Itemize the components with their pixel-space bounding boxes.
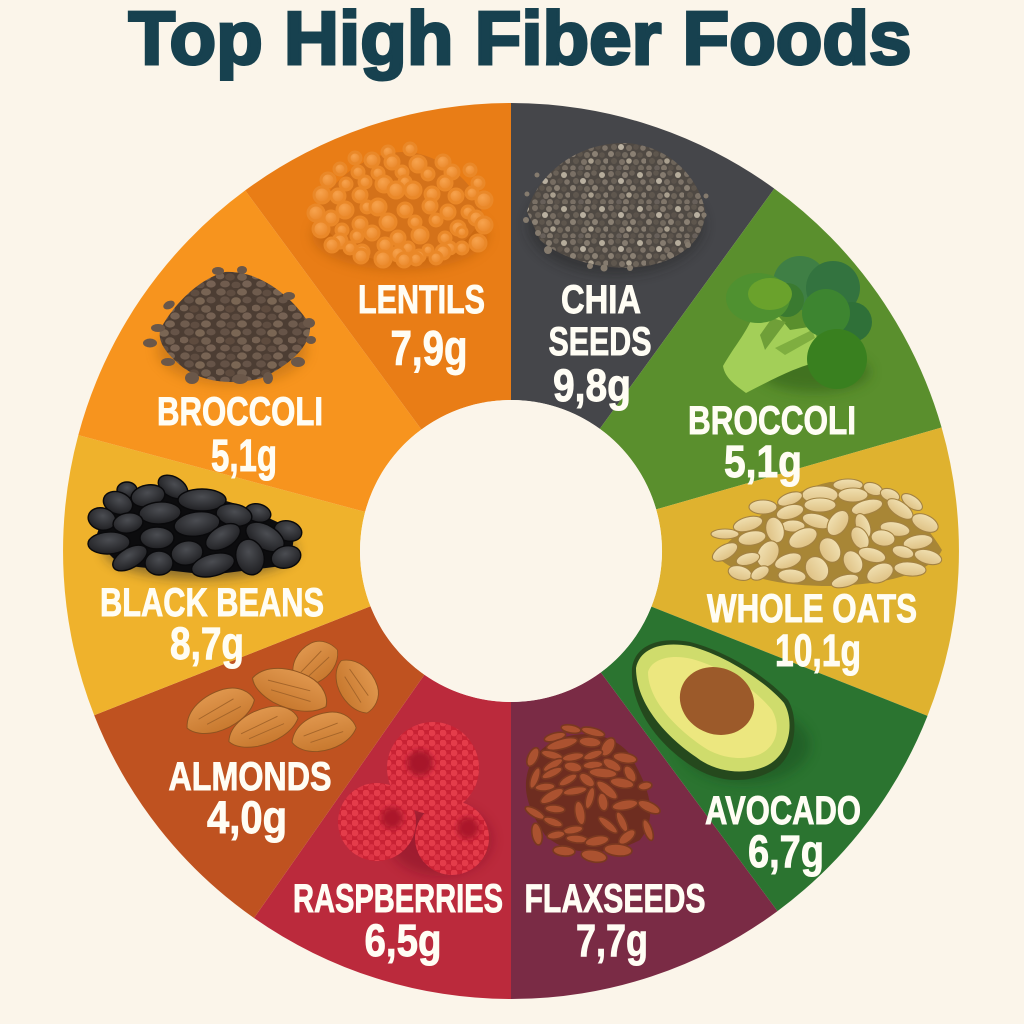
label: flaxseeds: FLAXSEEDS	[524, 877, 706, 921]
panel: broccoli right	[600, 189, 942, 509]
panel: lentils	[245, 103, 511, 430]
label: lentils: 7,9g	[390, 322, 468, 376]
label: chia seeds	[548, 278, 652, 411]
icon: black beans	[86, 470, 304, 581]
icon: flaxseeds pile	[523, 723, 662, 864]
label: broccoli left	[157, 390, 323, 481]
wedge: avocado	[601, 607, 928, 911]
label: black beans	[100, 581, 324, 669]
wedge: almonds	[94, 606, 424, 918]
label: avocado	[705, 789, 861, 877]
label: broccoli left: 5,1g	[211, 430, 277, 481]
label: black beans: 8,7g	[170, 618, 244, 669]
panel: chia seeds	[511, 103, 774, 429]
label: almonds: 4,0g	[207, 792, 287, 843]
label: chia seeds: SEEDS	[548, 320, 652, 364]
label: avocado: 6,7g	[748, 826, 824, 877]
donut chart	[63, 103, 959, 999]
icon: almonds	[179, 633, 386, 757]
panel: black beans	[63, 435, 370, 715]
label: almonds	[168, 755, 332, 843]
label: chia seeds: 9,8g	[553, 360, 631, 411]
icon: chia seeds pile	[523, 143, 708, 275]
wedge: flaxseeds	[511, 672, 778, 999]
label: avocado: AVOCADO	[705, 789, 861, 833]
wedge: black beans	[63, 435, 370, 715]
label: raspberries	[293, 877, 503, 966]
label: broccoli right: BROCCOLI	[688, 399, 856, 443]
label: broccoli left: BROCCOLI	[157, 390, 323, 434]
panel: flaxseeds	[511, 672, 778, 999]
label: raspberries: 6,5g	[364, 915, 442, 966]
icon: avocado half	[632, 640, 810, 783]
label: flaxseeds	[524, 877, 706, 966]
label: lentils	[358, 278, 485, 376]
icon: lentils pile	[308, 143, 492, 270]
wedge: whole oats	[651, 428, 959, 716]
label: broccoli right: 5,1g	[724, 436, 802, 487]
wedge: broccoli left	[78, 190, 421, 512]
label: whole oats: WHOLE OATS	[707, 587, 917, 631]
panel: whole oats	[651, 428, 959, 716]
label: broccoli right	[688, 399, 856, 487]
label: black beans: BLACK BEANS	[100, 581, 324, 625]
icon: dark seeds pile	[143, 266, 316, 385]
wedge: chia seeds	[511, 103, 774, 429]
label: raspberries: RASPBERRIES	[293, 877, 503, 921]
label: lentils: LENTILS	[358, 278, 485, 322]
donut hole	[360, 400, 662, 702]
label: whole oats	[707, 587, 917, 676]
panel: broccoli left	[78, 190, 421, 512]
wedge: lentils	[245, 103, 511, 430]
panel: raspberries	[254, 675, 511, 999]
panel: avocado	[601, 607, 928, 911]
wedge: raspberries	[254, 675, 511, 999]
wedge: broccoli right	[600, 189, 942, 509]
icon: oats pile	[709, 479, 943, 590]
labels layer	[100, 278, 917, 966]
label: almonds: ALMONDS	[168, 755, 332, 799]
icon: avocado pit	[669, 655, 765, 747]
icon: broccoli	[723, 256, 872, 393]
icon: raspberries	[338, 722, 492, 876]
panel: almonds	[94, 606, 424, 918]
label: flaxseeds: 7,7g	[576, 915, 648, 966]
label: whole oats: 10,1g	[775, 625, 861, 676]
label: chia seeds: CHIA	[561, 278, 641, 322]
